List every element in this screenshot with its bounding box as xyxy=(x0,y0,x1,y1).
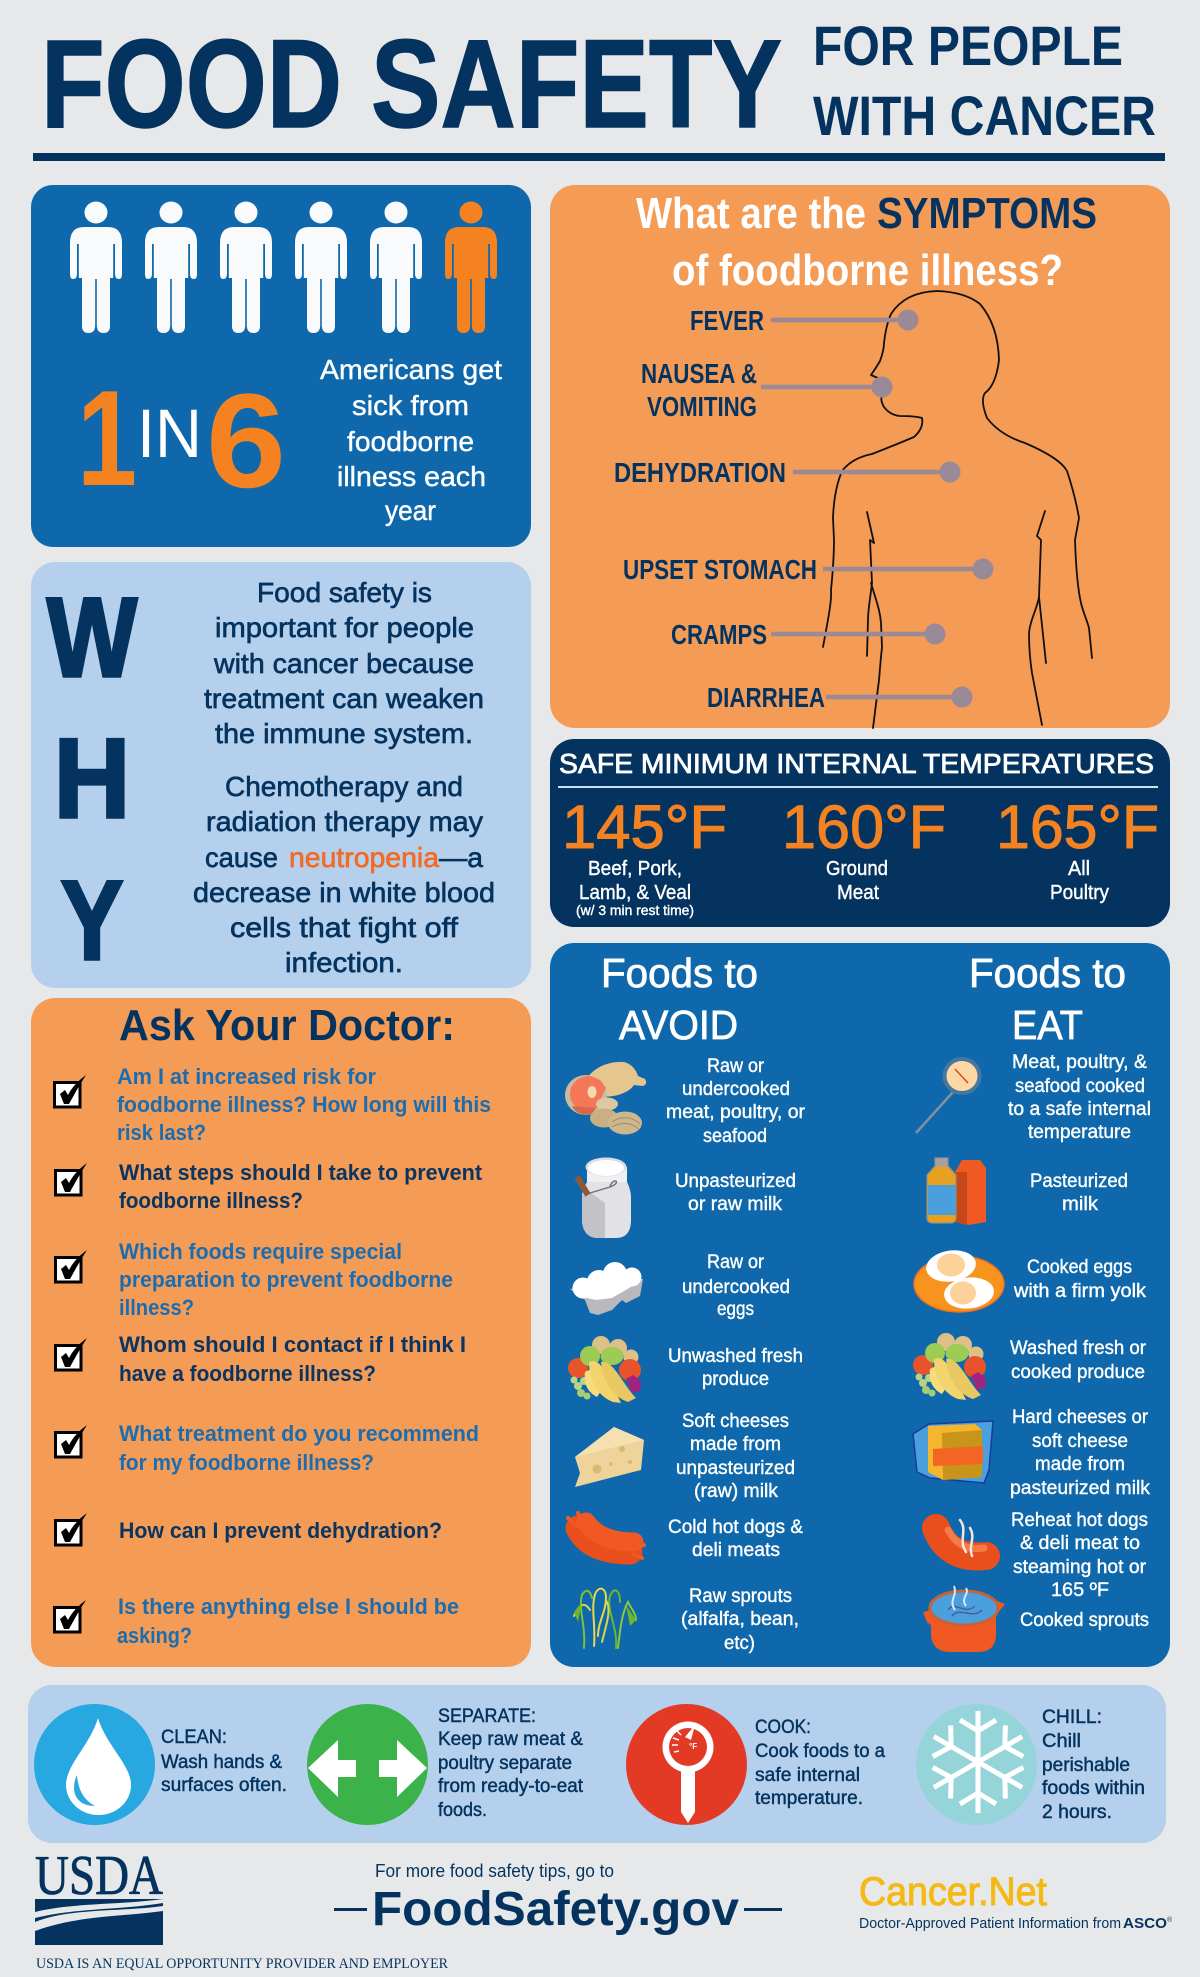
text: hard cheeses: pasteurized milk xyxy=(1010,1477,1150,1499)
text: raw eggs: Raw or xyxy=(707,1251,764,1273)
temperature: 145F: Lamb, & Veal xyxy=(579,882,691,904)
text: cold hot dogs: deli meats xyxy=(692,1539,780,1561)
text: chemotherapy and neutropenia: cells that fight off xyxy=(230,912,458,943)
question 5: for my foodborne illness? xyxy=(119,1450,374,1475)
question 3: Which foods require special xyxy=(119,1239,402,1264)
symptom: nausea and vomiting: VOMITING xyxy=(647,391,757,422)
text: why food safety matters: with cancer because xyxy=(213,648,474,679)
text: unpasteurized milk: Unpasteurized xyxy=(675,1170,796,1192)
panel: ask your doctor xyxy=(31,998,531,1667)
text: cook: temperature. xyxy=(755,1788,863,1809)
icon: raw sprouts xyxy=(574,1589,636,1648)
text: chemotherapy and neutropenia xyxy=(193,771,495,978)
question 5 xyxy=(56,1421,479,1475)
temperature: 160F: Ground xyxy=(826,858,888,880)
text: Americans get sick: year xyxy=(385,495,436,526)
temperature: 160F: Meat xyxy=(837,882,879,904)
text: Americans get sick: sick from xyxy=(352,390,469,421)
text: separate: Keep raw meat & xyxy=(438,1729,583,1750)
text: cooked eggs: Cooked eggs xyxy=(1027,1256,1132,1278)
text: cook xyxy=(755,1717,885,1809)
question 6: How can I prevent dehydration? xyxy=(119,1518,442,1543)
text: cook: safe internal xyxy=(755,1765,860,1786)
text: cold hot dogs xyxy=(668,1516,803,1561)
text: separate xyxy=(438,1706,584,1821)
text: chill: foods within xyxy=(1042,1778,1145,1799)
text: washed produce: cooked produce xyxy=(1011,1361,1145,1383)
panel: why xyxy=(31,562,531,988)
text: clean: surfaces often. xyxy=(161,1775,287,1796)
heading: temperatures: SAFE MINIMUM INTERNAL TEMPERATURES xyxy=(559,748,1154,779)
text: chemotherapy and neutropenia: radiation therapy may xyxy=(206,806,483,837)
text: raw eggs xyxy=(682,1251,790,1320)
icon: chill snowflake xyxy=(916,1704,1037,1825)
heading: symptoms: SYMPTOMS xyxy=(877,189,1097,238)
text: chill: perishable xyxy=(1042,1755,1130,1776)
text: separate: from ready-to-eat xyxy=(438,1776,584,1797)
text: reheat hot dogs: Reheat hot dogs xyxy=(1011,1509,1148,1531)
heading: symptoms: of foodborne illness? xyxy=(672,246,1063,295)
text: reheat hot dogs xyxy=(1011,1509,1148,1601)
text: clean xyxy=(161,1727,287,1796)
icon: soft cheese xyxy=(575,1427,644,1487)
icon: raw meat and seafood xyxy=(565,1062,646,1134)
text: meat cooked: Meat, poultry, & xyxy=(1012,1051,1147,1073)
panel: safe minimum internal temperatures xyxy=(550,739,1170,927)
text: chemotherapy and neutropenia: —a xyxy=(439,842,483,873)
symptom: nausea and vomiting: NAUSEA & xyxy=(641,358,757,389)
text: soft cheeses: Soft cheeses xyxy=(682,1410,789,1432)
question 7: asking? xyxy=(117,1623,192,1648)
symptom: diarrhea xyxy=(707,682,972,713)
symptom: dehydration xyxy=(614,457,960,488)
symptom: fever: FEVER xyxy=(690,305,764,336)
question 2: What steps should I take to prevent xyxy=(119,1160,483,1185)
text: washed produce: Washed fresh or xyxy=(1010,1337,1146,1359)
text: separate: poultry separate xyxy=(438,1753,572,1774)
text: pasteurized milk xyxy=(1030,1170,1128,1215)
text: hard cheeses: soft cheese xyxy=(1032,1430,1128,1452)
symptom: upset stomach xyxy=(623,554,994,585)
symptom: cramps: CRAMPS xyxy=(671,619,767,650)
icon: milk can xyxy=(577,1158,631,1238)
temperature: 145F xyxy=(562,793,727,918)
question 1: Am I at increased risk for xyxy=(117,1064,376,1089)
heading: foods to eat: Foods to xyxy=(969,950,1126,996)
call to action: FoodSafety.gov: FoodSafety.gov xyxy=(372,1883,739,1936)
logo: Cancer.Net: Cancer.Net xyxy=(859,1870,1047,1914)
text: raw sprouts: Raw sprouts xyxy=(689,1585,792,1607)
text: meat cooked: seafood cooked xyxy=(1015,1075,1145,1097)
text: unpasteurized milk xyxy=(675,1170,796,1215)
text: chill: CHILL: xyxy=(1042,1707,1102,1728)
symptom: fever xyxy=(690,305,918,336)
temperature: 160F xyxy=(782,793,946,904)
question 4 xyxy=(56,1332,466,1386)
text: why food safety matters: treatment can weaken xyxy=(204,683,484,714)
heading: WHY vertical letters xyxy=(47,575,137,983)
logo: Cancer.Net: ASCO xyxy=(1123,1915,1167,1932)
call to action: FoodSafety.gov xyxy=(334,1861,782,1936)
text: chemotherapy and neutropenia: neutropenia xyxy=(289,842,439,873)
temperature: 145F: Beef, Pork, xyxy=(588,858,682,880)
icon: cook thermometer: °F xyxy=(689,1742,697,1751)
text: raw eggs: undercooked xyxy=(682,1276,790,1298)
text: pasteurized milk: Pasteurized xyxy=(1030,1170,1128,1192)
text: hard cheeses: Hard cheeses or xyxy=(1012,1406,1148,1428)
text: Americans get sick: illness each xyxy=(337,461,486,492)
question 2: foodborne illness? xyxy=(119,1188,303,1213)
question 1: foodborne illness? How long will this xyxy=(117,1092,491,1117)
text: raw meat xyxy=(666,1055,805,1147)
question 3: illness? xyxy=(119,1295,194,1320)
logo: USDA xyxy=(35,1845,448,1972)
text: soft cheeses: made from xyxy=(690,1433,781,1455)
text: Americans get sick: foodborne xyxy=(347,426,474,457)
text: unwashed produce: Unwashed fresh xyxy=(668,1345,803,1367)
question 3: preparation to prevent foodborne xyxy=(119,1267,453,1292)
title: WITH CANCER xyxy=(813,84,1156,147)
logo: Cancer.Net xyxy=(859,1870,1173,1932)
icon: eggs in carton xyxy=(570,1262,643,1315)
text: raw meat: seafood xyxy=(703,1125,767,1147)
question 7 xyxy=(54,1594,459,1648)
text: reheat hot dogs: steaming hot or xyxy=(1013,1556,1147,1578)
illustration: human body outline xyxy=(823,291,1092,728)
text: separate: SEPARATE: xyxy=(438,1706,536,1727)
question 5: What treatment do you recommend xyxy=(119,1421,479,1446)
text: cooked eggs xyxy=(1013,1256,1146,1302)
call to action: FoodSafety.gov: For more food safety tips, go to xyxy=(375,1861,614,1881)
text: raw sprouts: (alfalfa, bean, xyxy=(681,1608,799,1630)
text: chill: Chill xyxy=(1042,1731,1081,1752)
icon: clean water drop xyxy=(34,1704,155,1825)
question 4: Whom should I contact if I think I xyxy=(119,1332,466,1357)
big number: 1 in 6: 1 xyxy=(77,362,137,514)
text: pasteurized milk: milk xyxy=(1062,1193,1098,1215)
title: FOR PEOPLE xyxy=(813,14,1123,77)
symptom: upset stomach: UPSET STOMACH xyxy=(623,554,817,585)
heading: symptoms: What are the xyxy=(636,189,866,238)
heading: foods to avoid xyxy=(601,950,758,1048)
question 2 xyxy=(56,1160,483,1213)
text: clean: Wash hands & xyxy=(161,1752,282,1773)
panel: clean separate cook chill xyxy=(28,1685,1166,1843)
text: separate: foods. xyxy=(438,1800,487,1821)
text: Americans get sick xyxy=(320,354,502,526)
panel: foods to avoid and eat xyxy=(550,943,1170,1667)
text: washed produce xyxy=(1010,1337,1146,1383)
question 6 xyxy=(56,1513,442,1545)
text: chemotherapy and neutropenia: infection. xyxy=(285,947,403,978)
icon: pot of cooked sprouts xyxy=(923,1586,1005,1652)
text: raw meat: undercooked xyxy=(682,1078,790,1100)
icon: unwashed produce xyxy=(568,1336,641,1403)
icon: cook thermometer xyxy=(626,1704,747,1825)
text: cooked eggs: with a firm yolk xyxy=(1013,1280,1146,1302)
text: reheat hot dogs: 165 ºF xyxy=(1051,1579,1109,1601)
text: reheat hot dogs: & deli meat to xyxy=(1020,1532,1140,1554)
icon: pasteurized milk bottle and carton xyxy=(927,1158,986,1225)
logo: USDA: USDA xyxy=(35,1845,163,1907)
heading: foods to avoid: AVOID xyxy=(619,1002,738,1048)
text: chill: 2 hours. xyxy=(1042,1802,1112,1823)
text: cooked sprouts: Cooked sprouts xyxy=(1020,1609,1149,1631)
panel: 1 in 6 statistic xyxy=(31,185,531,547)
text: raw eggs: eggs xyxy=(717,1298,754,1320)
text: hard cheeses: made from xyxy=(1035,1453,1125,1475)
icon: washed produce xyxy=(913,1333,986,1400)
text: chill xyxy=(1042,1707,1145,1823)
logo: Cancer.Net: Doctor-Approved Patient Information from xyxy=(859,1915,1121,1932)
text: raw meat: Raw or xyxy=(707,1055,764,1077)
icon: packaged hard cheese xyxy=(913,1421,993,1483)
logo: Cancer.Net: ® xyxy=(1167,1916,1173,1924)
text: meat cooked xyxy=(1008,1051,1151,1143)
big number: 1 in 6: 6 xyxy=(206,367,286,516)
question 4: have a foodborne illness? xyxy=(119,1361,376,1386)
text: meat cooked: to a safe internal xyxy=(1008,1098,1151,1120)
title: FOOD SAFETY xyxy=(41,15,782,154)
icon: separate arrows xyxy=(307,1704,428,1825)
question 7: Is there anything else I should be xyxy=(118,1594,459,1619)
text: Americans get sick: Americans get xyxy=(320,354,502,385)
text: clean: CLEAN: xyxy=(161,1727,227,1748)
icon: hot dogs xyxy=(568,1513,644,1558)
heading: foods to eat: EAT xyxy=(1012,1002,1083,1048)
text: raw sprouts xyxy=(681,1585,799,1654)
text: why food safety matters: important for people xyxy=(215,612,474,643)
temperature: 145F: 145°F xyxy=(562,793,727,861)
icon: cooked eggs on plate xyxy=(914,1247,1004,1312)
big number: 1 in 6: IN xyxy=(137,395,202,472)
text: why food safety matters xyxy=(204,577,484,749)
text: why food safety matters: the immune system. xyxy=(215,718,473,749)
text: unwashed produce xyxy=(668,1345,803,1390)
panel: symptoms xyxy=(550,185,1170,728)
icon: steaming hot dogs xyxy=(936,1520,986,1556)
heading: foods to avoid: Foods to xyxy=(601,950,758,996)
text: chemotherapy and neutropenia: cause xyxy=(205,842,278,873)
big number: 1 in 6 xyxy=(77,362,286,516)
symptom: dehydration: DEHYDRATION xyxy=(614,457,786,488)
text: unwashed produce: produce xyxy=(702,1368,769,1390)
icon: food thermometer xyxy=(916,1059,980,1133)
heading: WHY vertical letters: H xyxy=(54,716,130,841)
heading: ask your doctor: Ask Your Doctor: xyxy=(119,1001,455,1050)
text: cold hot dogs: Cold hot dogs & xyxy=(668,1516,803,1538)
temperature: 160F: 160°F xyxy=(782,793,946,861)
symptom: nausea and vomiting xyxy=(641,358,892,422)
text: raw sprouts: etc) xyxy=(724,1632,755,1654)
text: cook: COOK: xyxy=(755,1717,811,1738)
text: unpasteurized milk: or raw milk xyxy=(688,1193,782,1215)
symptom: diarrhea: DIARRHEA xyxy=(707,682,825,713)
question 3 xyxy=(56,1239,453,1320)
symptom: cramps xyxy=(671,619,946,650)
heading: WHY vertical letters: Y xyxy=(61,858,123,983)
heading: WHY vertical letters: W xyxy=(47,575,137,700)
text: soft cheeses: unpasteurized xyxy=(676,1457,795,1479)
heading: foods to eat xyxy=(969,950,1126,1048)
text: raw meat: meat, poultry, or xyxy=(666,1101,805,1123)
temperature: 165F: Poultry xyxy=(1050,882,1109,904)
temperature: 165F: 165°F xyxy=(996,793,1159,861)
heading: symptoms xyxy=(636,189,1097,295)
temperature: 165F: All xyxy=(1068,858,1090,880)
question 1: risk last? xyxy=(117,1120,206,1145)
icon: row of six people xyxy=(70,202,497,333)
text: hard cheeses xyxy=(1010,1406,1150,1499)
temperature: 165F xyxy=(996,793,1159,904)
text: soft cheeses xyxy=(676,1410,795,1502)
text: why food safety matters: Food safety is xyxy=(257,577,432,608)
text: chemotherapy and neutropenia: Chemotherapy and xyxy=(225,771,463,802)
text: cook: Cook foods to a xyxy=(755,1741,885,1762)
logo: USDA: USDA IS AN EQUAL OPPORTUNITY PROVIDER AND EMPLOYER xyxy=(36,1956,448,1972)
question 1 xyxy=(54,1064,491,1145)
text: chemotherapy and neutropenia: decrease in white blood xyxy=(193,877,495,908)
temperature: 145F: (w/ 3 min rest time) xyxy=(576,902,694,918)
text: meat cooked: temperature xyxy=(1028,1121,1131,1143)
text: soft cheeses: (raw) milk xyxy=(694,1480,778,1502)
